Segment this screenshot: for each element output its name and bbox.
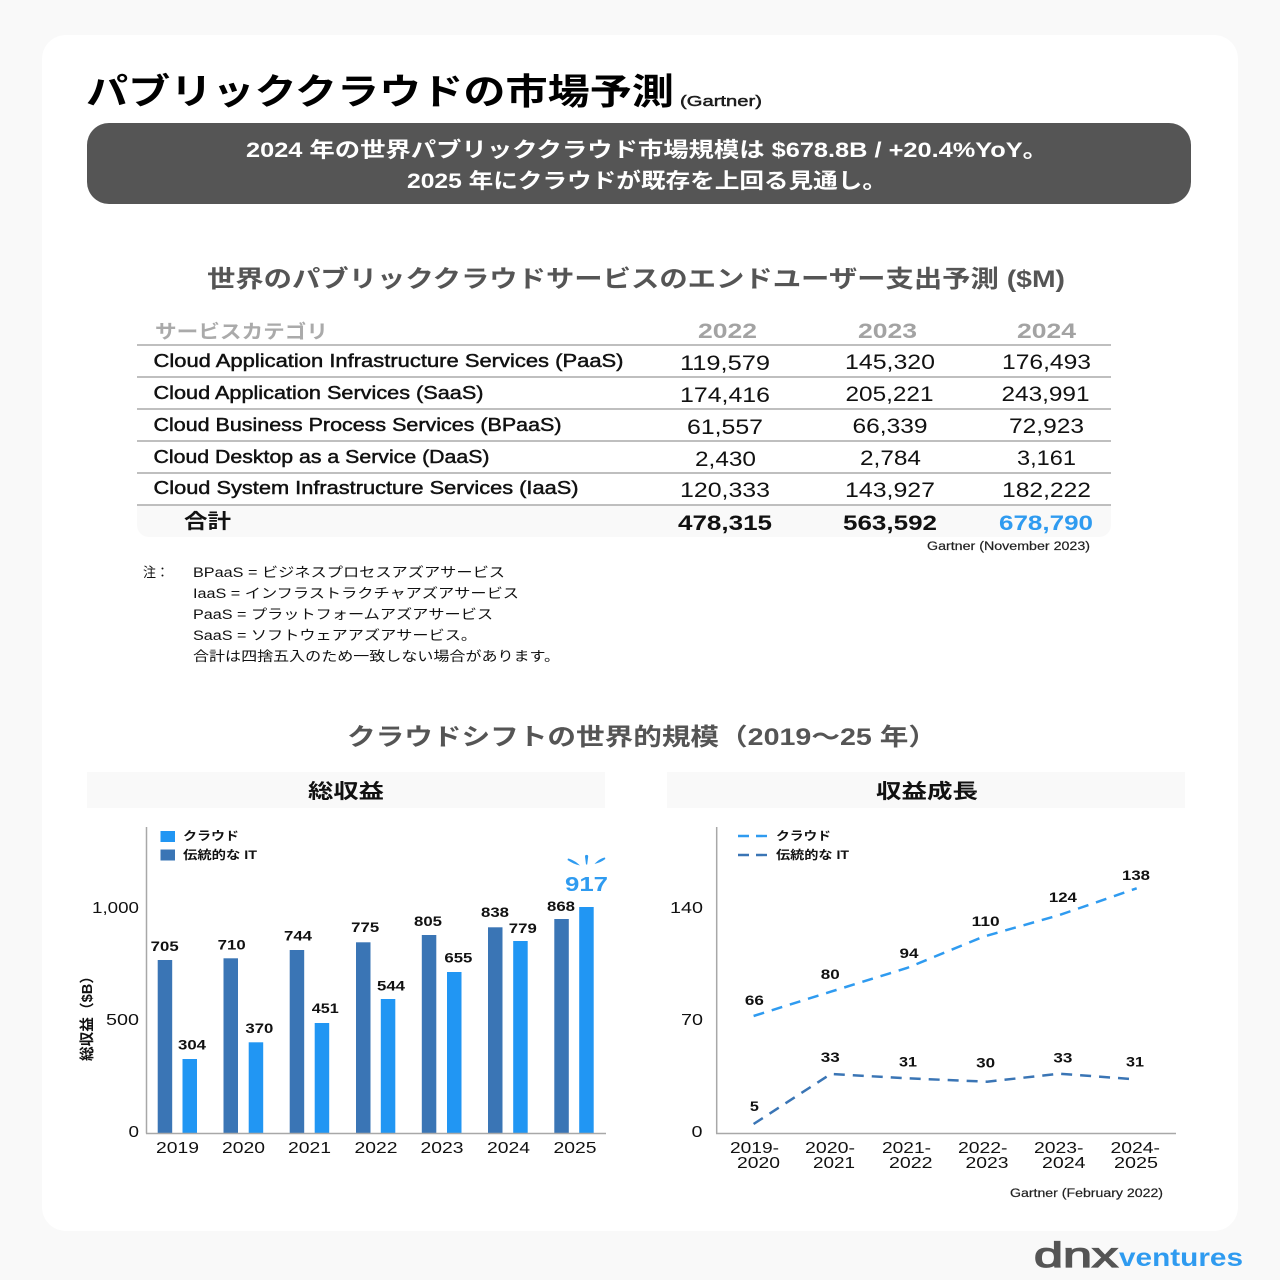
table values: 243,991 bbox=[1002, 383, 1090, 406]
table values: 182,222 bbox=[1002, 479, 1091, 502]
bar value labels bbox=[151, 899, 576, 1052]
line value labels: 33 bbox=[1053, 1051, 1073, 1066]
line value labels: 124 bbox=[1049, 890, 1078, 905]
table header row: 2023 bbox=[858, 320, 917, 343]
line value labels bbox=[745, 868, 1151, 1114]
panel header: revenue growth: 収益成長 bbox=[876, 779, 978, 803]
notes: PaaS = プラットフォームアズアサービス bbox=[193, 607, 493, 622]
legend: revenue growth bbox=[738, 829, 850, 862]
x axis labels: revenue growth: 2024- bbox=[1110, 1140, 1160, 1157]
logo: dnx ventures bbox=[1034, 1236, 1243, 1275]
x axis labels: revenue growth: 2020 bbox=[737, 1155, 780, 1172]
table values: 2,430 bbox=[695, 448, 756, 471]
bar chart bbox=[146, 827, 608, 1134]
panel header: total revenue: 総収益 bbox=[308, 780, 384, 803]
legend: total revenue: 伝統的な IT bbox=[183, 847, 258, 862]
line value labels: 31 bbox=[899, 1055, 918, 1070]
line value labels: 30 bbox=[976, 1055, 995, 1070]
bar value labels: 710 bbox=[218, 938, 246, 952]
line value labels: 31 bbox=[1126, 1055, 1145, 1070]
section heading: クラウドシフトの世界的規模（2019～25 年） bbox=[347, 724, 937, 751]
line value labels: 94 bbox=[900, 946, 919, 961]
y axis labels: revenue growth bbox=[670, 900, 703, 1141]
legend: total revenue bbox=[160, 829, 258, 862]
bar value labels: 370 bbox=[245, 1021, 273, 1036]
table row labels: Cloud System Infrastructure Services (IaaS) bbox=[154, 478, 578, 498]
y axis labels: total revenue: 0 bbox=[128, 1124, 139, 1141]
x axis labels: revenue growth: 2021- bbox=[882, 1140, 931, 1157]
table values: 176,493 bbox=[1002, 351, 1091, 374]
x axis labels: revenue growth: 2021 bbox=[813, 1155, 855, 1172]
x axis labels: revenue growth: 2023- bbox=[1034, 1140, 1084, 1157]
table values: 61,557 bbox=[687, 416, 763, 439]
table header row: サービスカテゴリ bbox=[155, 320, 328, 343]
table row labels: Cloud Application Infrastructure Services (PaaS) bbox=[154, 351, 624, 371]
legend: total revenue: クラウド bbox=[183, 829, 239, 843]
table values: 119,579 bbox=[680, 352, 770, 375]
x axis labels: total revenue: 2021 bbox=[288, 1140, 331, 1157]
table row labels: Cloud Desktop as a Service (DaaS) bbox=[154, 447, 490, 467]
bar value labels: 705 bbox=[151, 939, 179, 954]
bar value labels: 744 bbox=[284, 928, 313, 944]
panel header: revenue growth bbox=[667, 772, 1185, 808]
line: cloud growth bbox=[754, 888, 1137, 1016]
table values: 678,790 bbox=[999, 512, 1093, 535]
summary banner: 2024 年の世界パブリッククラウド市場規模は $678.8B / +20.4%YoY。 bbox=[246, 138, 1048, 162]
summary banner bbox=[87, 123, 1191, 204]
x axis labels: revenue growth: 2023 bbox=[966, 1155, 1009, 1172]
table values: 66,339 bbox=[852, 415, 928, 438]
line: traditional IT growth bbox=[754, 1074, 1135, 1124]
panel: total revenue bbox=[79, 772, 608, 1157]
y axis labels: revenue growth: 70 bbox=[681, 1012, 703, 1029]
table header row: 2022 bbox=[698, 320, 757, 343]
notes: SaaS = ソフトウェアアズアサービス。 bbox=[193, 628, 477, 643]
line value labels: 5 bbox=[750, 1099, 759, 1114]
y axis title: 総収益（$B） bbox=[79, 969, 96, 1061]
notes: 注： bbox=[143, 565, 169, 580]
bar value labels: 451 bbox=[312, 1001, 339, 1016]
line value labels: 33 bbox=[821, 1050, 840, 1065]
table row labels: Cloud Application Services (SaaS) bbox=[154, 383, 483, 403]
legend: revenue growth: クラウド bbox=[776, 829, 831, 843]
legend: revenue growth: 伝統的な IT bbox=[776, 847, 850, 862]
spending table bbox=[137, 320, 1111, 537]
y axis labels: revenue growth: 140 bbox=[670, 900, 703, 917]
table values: 120,333 bbox=[680, 479, 770, 502]
bar value labels: 805 bbox=[414, 914, 443, 929]
table row labels bbox=[154, 351, 624, 533]
x axis labels: revenue growth: 2019- bbox=[730, 1140, 779, 1157]
logo: dnx ventures: ventures bbox=[1119, 1244, 1243, 1272]
x axis labels: total revenue: 2024 bbox=[487, 1140, 530, 1157]
table header row: 2024 bbox=[1017, 320, 1076, 343]
x axis labels: revenue growth: 2022- bbox=[958, 1140, 1008, 1157]
x axis labels: total revenue bbox=[156, 1140, 597, 1157]
line value labels: 110 bbox=[972, 914, 1000, 929]
table values: 143,927 bbox=[845, 479, 935, 502]
line value labels: 80 bbox=[821, 967, 840, 982]
bar value labels: 779 bbox=[509, 921, 537, 936]
y axis labels: total revenue bbox=[92, 900, 139, 1141]
table values: 205,221 bbox=[846, 383, 934, 406]
x axis labels: total revenue: 2019 bbox=[156, 1140, 199, 1157]
y axis labels: total revenue: 500 bbox=[106, 1012, 139, 1029]
table values: 563,592 bbox=[843, 512, 937, 535]
title: (Gartner) bbox=[680, 93, 762, 110]
bar value labels: 304 bbox=[178, 1038, 207, 1052]
table source: Gartner (November 2023) bbox=[927, 541, 1090, 553]
y axis labels: revenue growth: 0 bbox=[692, 1124, 703, 1141]
x axis labels: total revenue: 2025 bbox=[554, 1140, 597, 1157]
x axis labels: total revenue: 2020 bbox=[222, 1140, 265, 1157]
logo: dnx ventures: dnx bbox=[1034, 1236, 1119, 1275]
x axis labels: revenue growth: 2025 bbox=[1114, 1155, 1158, 1172]
highlighted value 917 bbox=[565, 855, 608, 896]
table values: 72,923 bbox=[1009, 415, 1084, 438]
table header row bbox=[155, 320, 1076, 343]
x axis labels: revenue growth: 2022 bbox=[889, 1155, 933, 1172]
table row labels: Cloud Business Process Services (BPaaS) bbox=[154, 415, 562, 435]
panel header: total revenue bbox=[87, 772, 605, 808]
bar value labels: 838 bbox=[481, 905, 510, 920]
x axis labels: revenue growth: 2020- bbox=[805, 1140, 855, 1157]
notes: BPaaS = ビジネスプロセスアズアサービス bbox=[193, 565, 505, 580]
highlighted value 917: 917 bbox=[565, 874, 608, 896]
bar value labels: 544 bbox=[377, 978, 406, 994]
line chart bbox=[716, 827, 1176, 1134]
panel: revenue growth bbox=[667, 772, 1185, 1200]
table values: 3,161 bbox=[1017, 447, 1076, 470]
line value labels: 138 bbox=[1122, 868, 1151, 883]
x axis labels: total revenue: 2023 bbox=[420, 1140, 464, 1157]
x axis labels: total revenue: 2022 bbox=[354, 1140, 398, 1157]
table heading: 世界のパブリッククラウドサービスのエンドユーザー支出予測 ($M) bbox=[207, 265, 1065, 293]
bar value labels: 655 bbox=[444, 950, 473, 966]
notes bbox=[143, 565, 560, 664]
y axis labels: total revenue: 1,000 bbox=[92, 900, 139, 917]
summary banner: 2025 年にクラウドが既存を上回る見通し。 bbox=[407, 169, 887, 193]
notes: IaaS = インフラストラクチャアズアサービス bbox=[193, 586, 519, 601]
x axis labels: revenue growth bbox=[730, 1140, 1160, 1172]
table values: 145,320 bbox=[845, 351, 935, 374]
line value labels: 66 bbox=[745, 993, 765, 1008]
table values bbox=[678, 351, 1093, 535]
notes: 合計は四捨五入のため一致しない場合があります。 bbox=[193, 649, 560, 664]
table row labels: 合計 bbox=[184, 510, 231, 533]
table values: 2,784 bbox=[860, 447, 921, 470]
table values: 478,315 bbox=[678, 512, 772, 535]
x axis labels: revenue growth: 2024 bbox=[1042, 1155, 1086, 1172]
title: パブリッククラウドの市場予測 bbox=[86, 71, 674, 112]
bar value labels: 868 bbox=[547, 899, 576, 914]
chart source: Gartner (February 2022) bbox=[1010, 1188, 1163, 1200]
table values: 174,416 bbox=[680, 384, 770, 407]
bar value labels: 775 bbox=[351, 920, 380, 935]
